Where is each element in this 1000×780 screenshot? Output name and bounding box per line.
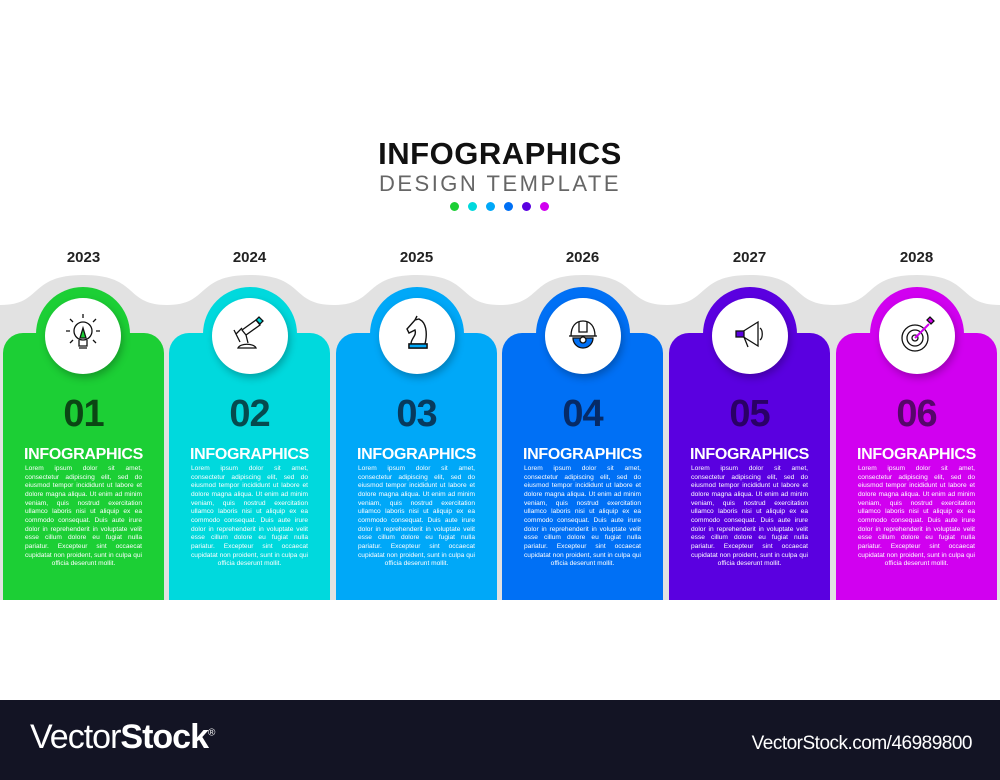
panel: step 02 [169, 287, 330, 600]
panel: step 06 [836, 287, 997, 600]
icon: microscope [212, 298, 288, 374]
heading: INFOGRAPHICS [857, 446, 976, 463]
text: 2024 [233, 249, 266, 266]
title: INFOGRAPHICS [378, 136, 622, 171]
footer logo: VectorStock® [30, 718, 214, 756]
number: 02 [229, 393, 270, 435]
color dots [450, 202, 549, 211]
text block: Lorem ipsum dolor sit amet, consectetur adipiscing elit, sed do eiusmod tempor incididunt ut labore et dolore magna aliqua. Ut enim ad minim veniam, quis nostrud exercitation ullamco laboris nisi ut aliquip ex ea commodo consequat. Duis aute irure dolor in reprehenderit in voluptate velit esse cillum dolore eu fugiat nulla pariatur. Excepteur sint occaecat cupidatat non proident, sunt in culpa qui officia deserunt mollit. [191, 465, 308, 567]
icon: helmet gear [545, 298, 621, 374]
heading: INFOGRAPHICS [24, 446, 143, 463]
panel: step 04 [502, 287, 663, 600]
icon: megaphone [712, 298, 788, 374]
footer bar [0, 700, 1000, 780]
gray wave band [0, 275, 1000, 600]
footer url: VectorStock.com/46989800 [752, 733, 972, 754]
text: 2027 [733, 249, 766, 266]
icon: target [879, 298, 955, 374]
number: 01 [63, 393, 104, 435]
years [67, 249, 933, 266]
icon: lightbulb [45, 298, 121, 374]
heading: INFOGRAPHICS [357, 446, 476, 463]
number: 03 [396, 393, 437, 435]
number: 05 [729, 393, 770, 435]
text: 2023 [67, 249, 100, 266]
text block: Lorem ipsum dolor sit amet, consectetur adipiscing elit, sed do eiusmod tempor incididunt ut labore et dolore magna aliqua. Ut enim ad minim veniam, quis nostrud exercitation ullamco laboris nisi ut aliquip ex ea commodo consequat. Duis aute irure dolor in reprehenderit in voluptate velit esse cillum dolore eu fugiat nulla pariatur. Excepteur sint occaecat cupidatat non proident, sunt in culpa qui officia deserunt mollit. [25, 465, 142, 567]
panel: step 01 [3, 287, 164, 600]
panel: step 05 [669, 287, 830, 600]
panel: step 03 [336, 287, 497, 600]
number: 04 [562, 393, 603, 435]
heading: INFOGRAPHICS [190, 446, 309, 463]
heading: INFOGRAPHICS [690, 446, 809, 463]
text block: Lorem ipsum dolor sit amet, consectetur adipiscing elit, sed do eiusmod tempor incididunt ut labore et dolore magna aliqua. Ut enim ad minim veniam, quis nostrud exercitation ullamco laboris nisi ut aliquip ex ea commodo consequat. Duis aute irure dolor in reprehenderit in voluptate velit esse cillum dolore eu fugiat nulla pariatur. Excepteur sint occaecat cupidatat non proident, sunt in culpa qui officia deserunt mollit. [524, 465, 641, 567]
text: 2025 [400, 249, 433, 266]
heading: INFOGRAPHICS [523, 446, 642, 463]
number: 06 [896, 393, 937, 435]
text: 2026 [566, 249, 599, 266]
text: 2028 [900, 249, 933, 266]
text block: Lorem ipsum dolor sit amet, consectetur adipiscing elit, sed do eiusmod tempor incididunt ut labore et dolore magna aliqua. Ut enim ad minim veniam, quis nostrud exercitation ullamco laboris nisi ut aliquip ex ea commodo consequat. Duis aute irure dolor in reprehenderit in voluptate velit esse cillum dolore eu fugiat nulla pariatur. Excepteur sint occaecat cupidatat non proident, sunt in culpa qui officia deserunt mollit. [858, 465, 975, 567]
text block: Lorem ipsum dolor sit amet, consectetur adipiscing elit, sed do eiusmod tempor incididunt ut labore et dolore magna aliqua. Ut enim ad minim veniam, quis nostrud exercitation ullamco laboris nisi ut aliquip ex ea commodo consequat. Duis aute irure dolor in reprehenderit in voluptate velit esse cillum dolore eu fugiat nulla pariatur. Excepteur sint occaecat cupidatat non proident, sunt in culpa qui officia deserunt mollit. [691, 465, 808, 567]
text block: Lorem ipsum dolor sit amet, consectetur adipiscing elit, sed do eiusmod tempor incididunt ut labore et dolore magna aliqua. Ut enim ad minim veniam, quis nostrud exercitation ullamco laboris nisi ut aliquip ex ea commodo consequat. Duis aute irure dolor in reprehenderit in voluptate velit esse cillum dolore eu fugiat nulla pariatur. Excepteur sint occaecat cupidatat non proident, sunt in culpa qui officia deserunt mollit. [358, 465, 475, 567]
subtitle: DESIGN TEMPLATE [379, 171, 621, 196]
icon: chess knight [379, 298, 455, 374]
